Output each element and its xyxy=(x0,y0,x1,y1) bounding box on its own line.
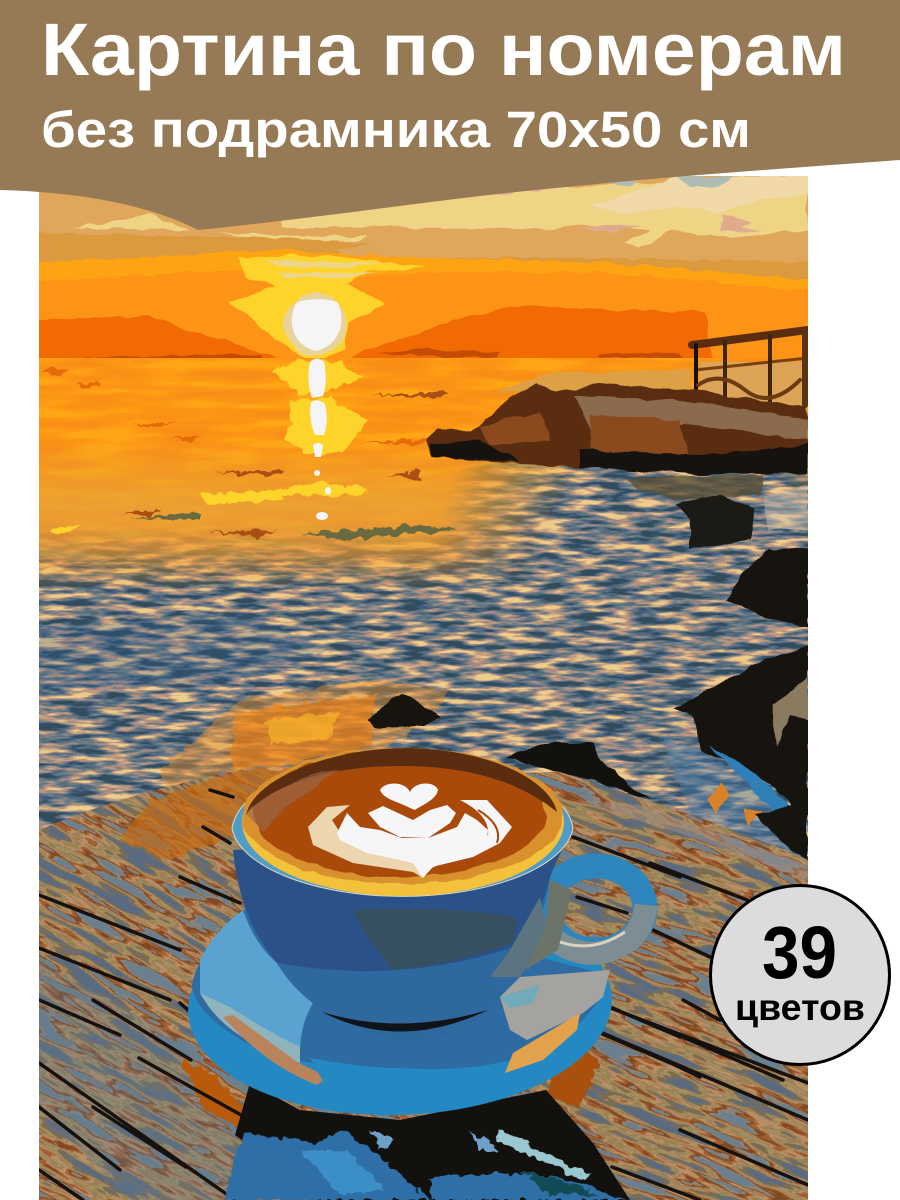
sky xyxy=(39,176,808,358)
pier xyxy=(692,330,808,410)
rocks: far headland xyxy=(426,370,808,550)
painting: sunset, sea and coffee cup xyxy=(30,176,808,1200)
cup foot shadow xyxy=(322,1010,488,1032)
coffee surface xyxy=(242,748,564,896)
distant mountains xyxy=(30,307,712,362)
sea: blue lower water xyxy=(39,526,808,859)
title: Картина по номерам xyxy=(41,8,846,91)
badge: 39 colours: цветов xyxy=(735,987,865,1028)
sun xyxy=(292,299,341,351)
saucer xyxy=(188,908,612,1116)
table plank lines xyxy=(39,790,808,1200)
rocks: dark shore boulders xyxy=(367,548,808,870)
badge: 39 colours xyxy=(710,886,890,1064)
badge: 39 colours: 39 xyxy=(762,911,837,994)
cup body xyxy=(233,833,573,1003)
latte art xyxy=(308,783,512,878)
wooden table xyxy=(39,770,808,1200)
coffee cup xyxy=(232,748,646,1042)
blue reflection on table xyxy=(225,1128,627,1200)
cup rim xyxy=(232,802,574,897)
sea: orange upper water xyxy=(39,358,808,740)
subtitle: без подрамника 70х50 см xyxy=(41,101,751,158)
cup handle xyxy=(547,866,646,953)
title banner xyxy=(0,0,900,230)
table shadow under saucer xyxy=(235,1083,630,1200)
shallow blue water by rocks xyxy=(660,735,808,870)
